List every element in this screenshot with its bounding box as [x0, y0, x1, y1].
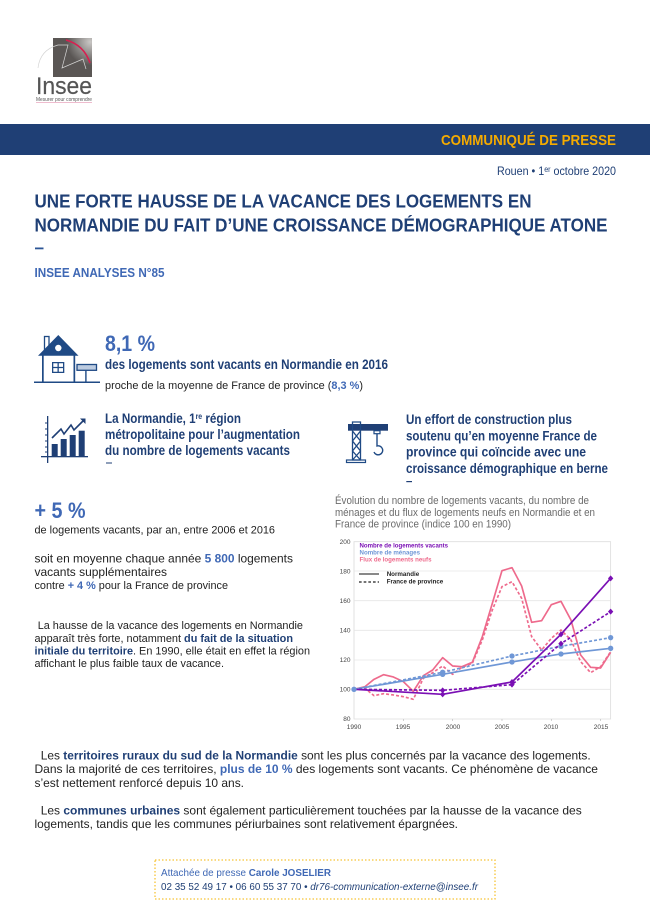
logo: Insee: Mesurer pour comprendre [36, 97, 92, 103]
icon: rising chart [41, 416, 88, 463]
text: hausse de la vacance: initiale du territoire. En 1990, elle était en effet la région [34, 646, 310, 658]
text: communes urbaines: logements, tandis que les communes périurbaines sont relativement épargnées. [34, 817, 458, 831]
text: 5 800 logements supplémentaires: soit en moyenne chaque année 5 800 logements [34, 552, 293, 566]
text: La Normandie 1re région: re [196, 412, 203, 421]
contact box [155, 860, 495, 899]
stat: + 5 % [34, 498, 275, 536]
date line: er [544, 165, 551, 174]
banner: communiqué de presse: COMMUNIQUÉ DE PRESSE [441, 132, 616, 149]
chart title [335, 494, 595, 530]
text: 5 800 logements supplémentaires: vacants supplémentaires [34, 565, 167, 579]
contact box: Attachée de presse Carole JOSELIER [161, 868, 332, 879]
line chart: France de province [387, 578, 444, 586]
line chart: 1995 [396, 724, 411, 731]
line chart: Normandie [387, 571, 420, 578]
stat: 8,1 % [105, 331, 388, 392]
line chart: 120 [340, 657, 351, 664]
stat: + 5 %: de logements vacants, par an, entre 2006 et 2016 [34, 524, 275, 536]
line chart: 160 [340, 598, 351, 605]
text: 5 800 logements supplémentaires [34, 552, 293, 592]
title [34, 190, 608, 249]
line chart: Flux de logements neufs [360, 556, 432, 564]
text: hausse de la vacance [34, 620, 310, 670]
text: communes urbaines: Les communes urbaines sont également particulièrement touchées par la hausse de la vacance des [41, 804, 582, 818]
text: La Normandie 1re région: du nombre de logements vacants [105, 443, 290, 458]
text: territoires ruraux: Les territoires ruraux du sud de la Normandie sont les plus concernés par la vacance des logements. [41, 748, 591, 762]
logo: Insee [36, 38, 92, 103]
line chart: 2015 [594, 724, 609, 731]
text: hausse de la vacance: affichant le plus faible taux de vacance. [34, 658, 224, 670]
text: effort de construction [406, 412, 608, 482]
date line: Rouen • 1 [497, 164, 550, 178]
text: hausse de la vacance: La hausse de la vacance des logements en Normandie [38, 620, 303, 632]
line chart: 2000 [446, 724, 461, 731]
title: UNE FORTE HAUSSE DE LA VACANCE DES LOGEMENTS EN [34, 190, 532, 212]
line chart: Nombre de ménages [360, 550, 420, 556]
subtitle: Insee Analyses: INSEE ANALYSES N°85 [34, 266, 165, 280]
contact box: 02 35 52 49 17 • 06 60 55 37 70 • dr76-communication-externe@insee.fr [161, 882, 479, 893]
text: effort de construction: province qui coïncide avec une [406, 444, 586, 460]
line chart: 2005 [495, 724, 510, 731]
text: communes urbaines [34, 804, 582, 831]
line chart: 2010 [544, 724, 559, 731]
line chart: 140 [340, 628, 351, 634]
icon: house [34, 335, 100, 383]
icon: construction crane [346, 422, 388, 462]
text: La Normandie 1re région: La Normandie, 1 [105, 411, 210, 426]
text: hausse de la vacance: apparaît très forte, notamment du fait de la situation [34, 633, 293, 645]
text: La Normandie 1re région: métropolitaine pour l’augmentation [105, 427, 300, 442]
text: effort de construction: croissance démographique en berne [406, 461, 608, 476]
line chart [340, 539, 613, 731]
text: territoires ruraux [34, 748, 598, 790]
logo: Insee: Insee [36, 73, 92, 100]
text: 5 800 logements supplémentaires: contre + 4 % pour la France de province [34, 580, 228, 592]
text: effort de construction: Un effort de construction plus [406, 412, 572, 427]
chart title: ménages et du flux de logements neufs en Normandie et en [335, 507, 595, 519]
line chart: 200 [340, 539, 351, 546]
banner: communiqué de presse [0, 124, 650, 155]
text: territoires ruraux: Dans la majorité de ces territoires, plus de 10 % des logements sont vacants. Ce phénomène de vacance [34, 762, 598, 776]
chart title: Évolution du nombre de logements vacants, du nombre de [335, 494, 589, 507]
stat: 8,1 %: proche de la moyenne de France de province (8,3 %) [105, 380, 363, 392]
text: effort de construction: soutenu qu’en moyenne France de [406, 428, 597, 444]
line chart: 180 [340, 568, 351, 576]
stat: + 5 %: + 5 % [34, 498, 86, 523]
line chart: 100 [340, 686, 351, 694]
text: territoires ruraux: s’est nettement renforcé depuis 10 ans. [34, 776, 244, 790]
line chart: Nombre de logements vacants [360, 542, 448, 550]
line chart: 1990 [347, 724, 362, 731]
stat: 8,1 %: 8,1 % [105, 331, 155, 356]
date line: octobre 2020 [551, 164, 616, 178]
text: La Normandie 1re région: région [202, 411, 241, 426]
line chart: 80 [343, 716, 351, 723]
chart title: France de province (indice 100 en 1990) [335, 518, 511, 530]
text: La Normandie 1re région [105, 411, 300, 464]
title: NORMANDIE DU FAIT D’UNE CROISSANCE DÉMOGRAPHIQUE ATONE [34, 214, 608, 236]
stat: 8,1 %: des logements sont vacants en Normandie en 2016 [105, 357, 388, 372]
